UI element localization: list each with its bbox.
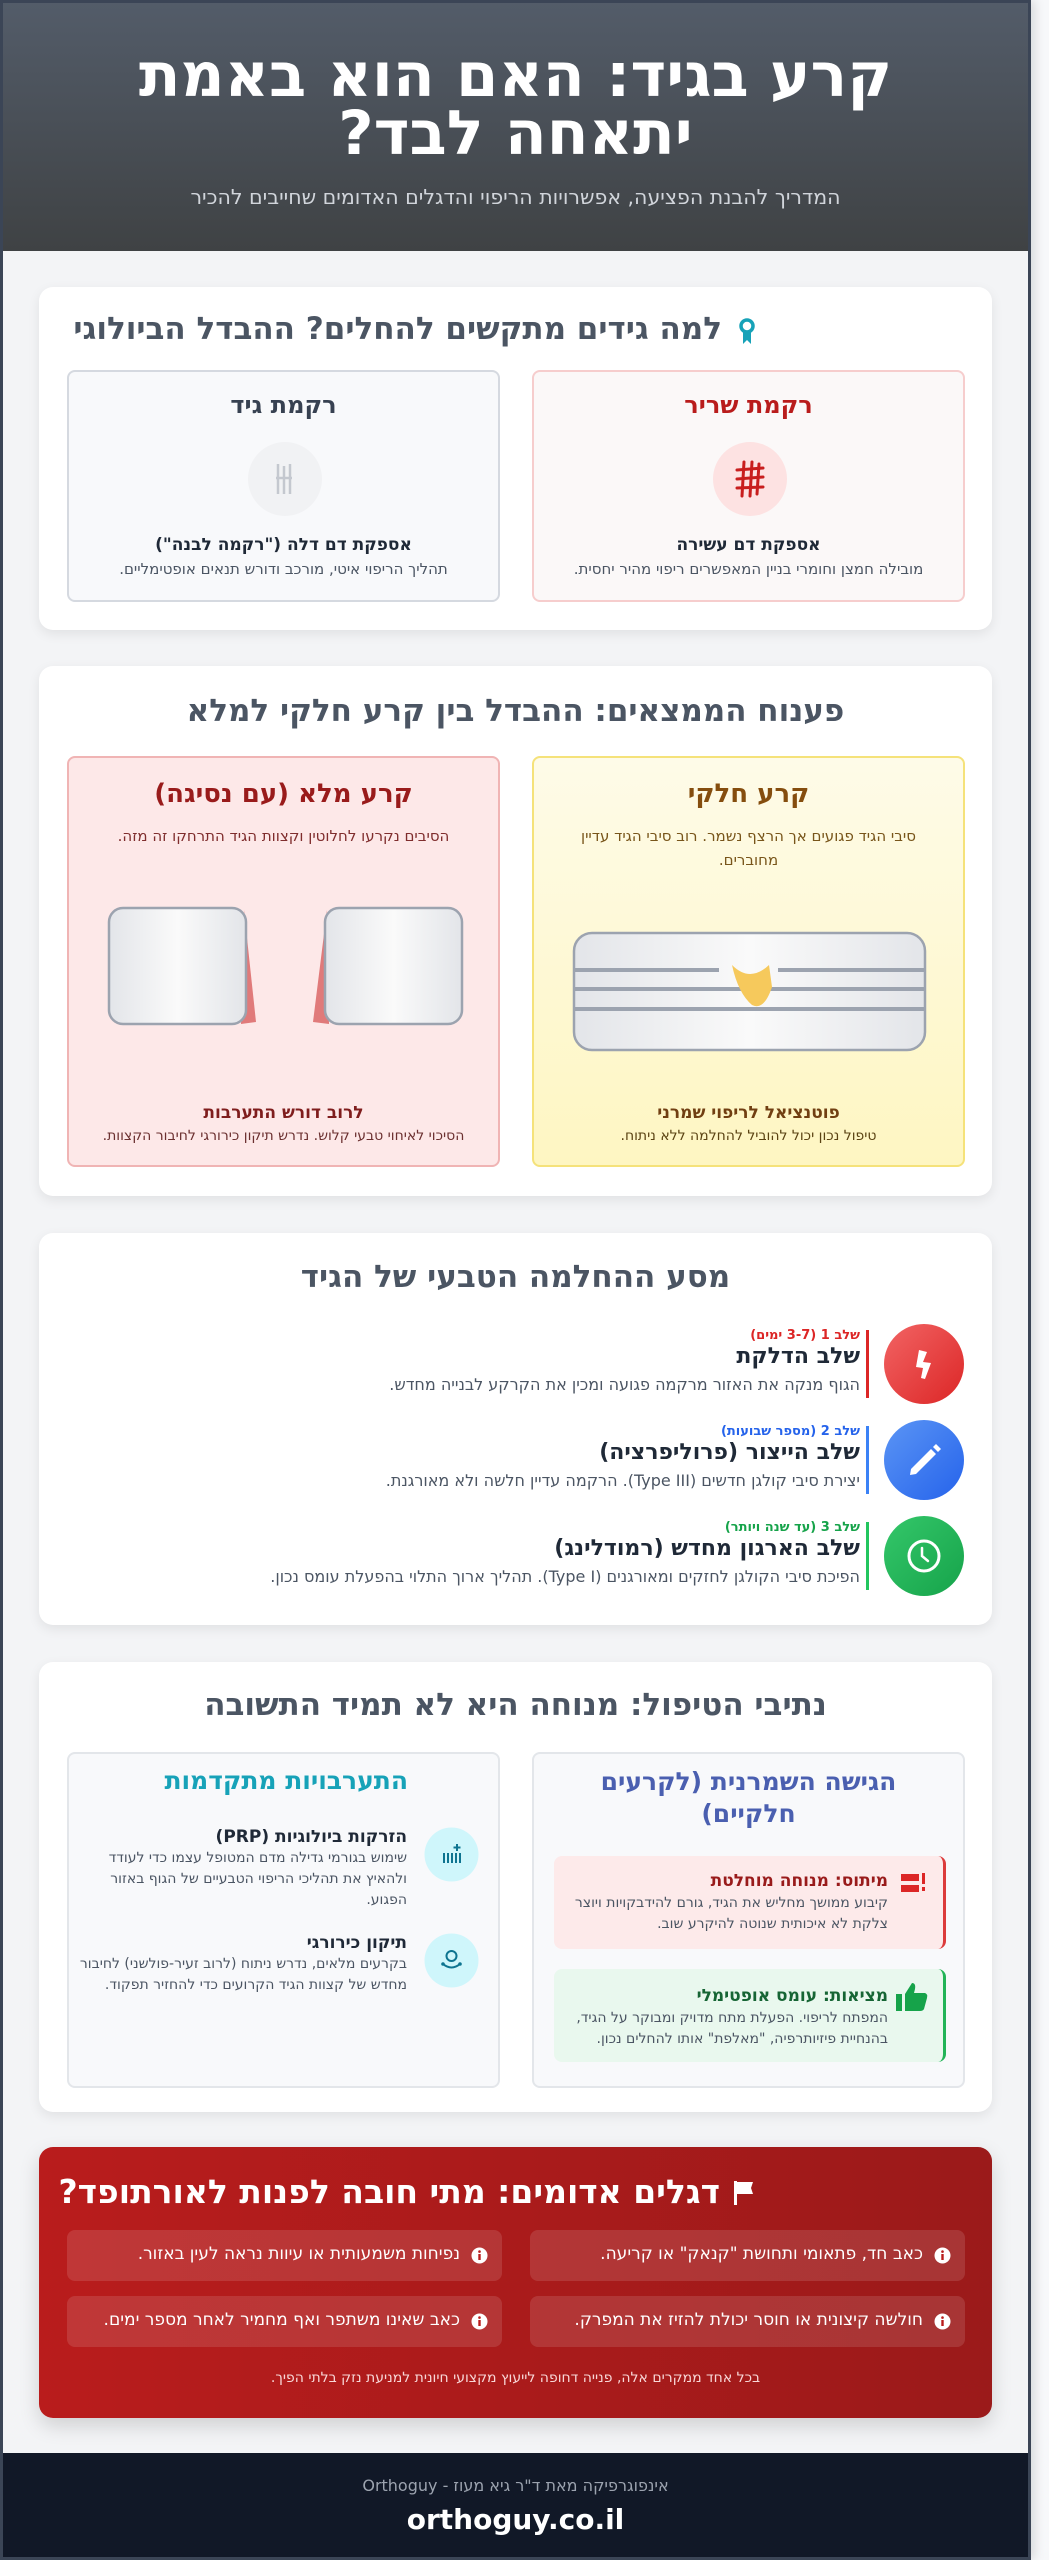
illustration: partially torn tendon (572, 932, 926, 1052)
panel: partial vs full tear (39, 666, 992, 1196)
box: tendon tissue (67, 370, 500, 602)
box: partial tear: סיבי הגיד פגועים אך הרצף נשמר. רוב סיבי הגיד עדיין מחוברים. (581, 827, 916, 869)
box: partial tear: פוטנציאל לריפוי שמרני (657, 1103, 840, 1123)
site url: orthoguy.co.il (407, 2503, 624, 2536)
box: advanced interventions (67, 1752, 500, 2088)
step 3: remodeling (270, 1516, 964, 1596)
step 3: remodeling: שלב הארגון מחדש (רמודלינג) (554, 1536, 860, 1561)
flag item 1 (530, 2230, 965, 2281)
box: full tear: לרוב דורש התערבות (203, 1103, 364, 1123)
step 2: proliferation: שלב הייצור (פרוליפרציה) (599, 1440, 860, 1465)
panel: treatment paths (39, 1662, 992, 2112)
item: surgical repair: בקרעים מלאים, נדרש ניתוח (לרוב זעיר-פולשני) לחיבור מחדש של קצוות הגיד הקרועים כדי להחזיר תפקוד. (80, 1956, 407, 1993)
header (3, 3, 1028, 251)
illustration: retracted tendon ends (108, 906, 464, 1026)
flag item 1: כאב חד, פתאומי ותחושת "קנאק" או קריעה. (600, 2244, 923, 2264)
step 1: inflammation: הגוף מנקה את האזור מרקמה פגועה ומכין את הקרקע לבנייה מחדש. (389, 1375, 860, 1394)
item: PRP injections (109, 1827, 478, 1908)
flag item 3: חולשה קיצונית או חוסר יכולת להזיז את המפרק. (574, 2310, 923, 2330)
icon: tendon fibers (276, 464, 292, 494)
icon: clock (884, 1516, 964, 1596)
flag item 4: כאב שאינו משתפר ואף מחמיר לאחר מספר ימים. (104, 2310, 460, 2330)
item: PRP injections: הזרקות ביולוגיות (PRP) (216, 1827, 407, 1847)
credit: אינפוגרפיקה מאת ד"ר גיא מעוז - Orthoguy (362, 2476, 669, 2495)
box: muscle tissue: אספקת דם עשירה (676, 535, 821, 555)
item: PRP injections: שימוש בגורמי גדילה מדם המטופל עצמו כדי לעודד ולהאיץ את תהליכי הריפוי הטבעיים של הגוף באזור הפגוע. (109, 1850, 407, 1908)
flag item 2: נפיחות משמעותית או עיוות נראה לעין באזור. (138, 2244, 460, 2264)
callout: reality: המפתח לריפוי. הפעלת מתח מדויק ומבוקר על הגיד, בהנחיית פיזיותרפיה, "מאלפת" אותו להחלים נכון. (576, 2010, 888, 2047)
icon: pencil (884, 1420, 964, 1500)
step 3: remodeling: הפיכת סיבי הקולגן לחזקים ומאורגנים (Type I). תהליך ארוך התלוי בהפעלת עומס נכון. (270, 1567, 860, 1586)
note: בכל אחד ממקרים אלה, פנייה דחופה לייעוץ מקצועי חיונית למניעת נזק בלתי הפיך. (271, 2370, 760, 2386)
flag item 3 (530, 2296, 965, 2347)
callout: reality (554, 1969, 946, 2062)
heading: נתיבי הטיפול: מנוחה היא לא תמיד התשובה (204, 1687, 827, 1723)
heading: פענוח הממצאים: ההבדל בין קרע חלקי למלא (187, 693, 844, 729)
title: יתאחה לבד? (338, 98, 693, 169)
title (139, 40, 892, 169)
item: surgical repair: תיקון כירורגי (307, 1933, 407, 1953)
box: muscle tissue: רקמת שריר (684, 391, 813, 419)
icon: surgeon (424, 1934, 478, 1988)
icon: ribbon (739, 318, 755, 344)
step 1: inflammation: שלב 1 (3-7 ימים) (750, 1328, 860, 1343)
box: muscle tissue: מובילה חמצן וחומרי בניין המאפשרים ריפוי מהיר יחסית. (574, 560, 923, 578)
box: tendon tissue: רקמת גיד (230, 391, 337, 419)
flag item 2 (67, 2230, 502, 2281)
flag item 4 (67, 2296, 502, 2347)
callout: myth (554, 1856, 946, 1949)
box: advanced interventions: התערבויות מתקדמות (164, 1766, 408, 1795)
box: partial tear (532, 756, 965, 1167)
box: partial tear: קרע חלקי (688, 779, 809, 809)
box: muscle tissue (532, 370, 965, 602)
step 3: remodeling: שלב 3 (עד שנה ויותר) (725, 1520, 860, 1535)
step 1: inflammation: שלב הדלקת (736, 1344, 860, 1369)
icon: flag (734, 2181, 753, 2205)
box: full tear: הסיבים נקרעו לחלוטין וקצוות הגיד התרחקו זה מזה. (118, 827, 449, 845)
panel: biological difference (39, 287, 992, 630)
step 2: proliferation (386, 1420, 964, 1500)
icon: exclamation (901, 1873, 925, 1892)
step 2: proliferation: שלב 2 (מספר שבועות) (721, 1424, 860, 1439)
callout: myth: קיבוע ממושך מחליש את הגיד, גורם להידבקויות ויוצר צלקת לא איכותית שנוטה להיקרע שוב. (575, 1895, 888, 1932)
callout: reality: מציאות: עומס אופטימלי (697, 1986, 888, 2006)
icon: thumbs up (896, 1983, 928, 2011)
item: surgical repair (80, 1933, 478, 1993)
icon: muscle fibers (713, 442, 787, 516)
box: conservative approach: הגישה השמרנית (לקרעים חלקיים) (601, 1767, 896, 1828)
box: full tear: הסיכוי לאיחוי טבעי קלוש. נדרש תיקון כירורגי לחיבור הקצוות. (103, 1128, 464, 1144)
footer (3, 2453, 1028, 2557)
box: full tear (67, 756, 500, 1167)
heading: מסע ההחלמה הטבעי של הגיד (301, 1259, 730, 1295)
box: tendon tissue: תהליך הריפוי איטי, מורכב ודורש תנאים אופטימליים. (119, 560, 448, 578)
box: full tear: קרע מלא (עם נסיגה) (154, 779, 413, 809)
step 1: inflammation (389, 1324, 964, 1404)
box: tendon tissue: אספקת דם דלה ("רקמה לבנה") (155, 535, 412, 555)
heading: why tendons heal slowly: למה גידים מתקשים להחלים? ההבדל הביולוגי (73, 311, 722, 347)
box: partial tear: טיפול נכון יכול להוביל להחלמה ללא ניתוח. (621, 1128, 876, 1144)
callout: myth: מיתוס: מנוחה מוחלטת (711, 1871, 888, 1891)
subtitle: המדריך להבנת הפציעה, אפשרויות הריפוי והדגלים האדומים שחייבים להכיר (190, 185, 841, 209)
panel: red flags (39, 2147, 992, 2418)
step 2: proliferation: יצירת סיבי קולגן חדשים (Type III). הרקמה עדיין חלשה ולא מאורגנת. (386, 1471, 860, 1490)
box: conservative approach (532, 1752, 965, 2088)
icon: bolt (884, 1324, 964, 1404)
title: קרע בגיד: האם הוא באמת (139, 40, 892, 111)
panel: healing journey (39, 1233, 992, 1625)
heading: red flags: דגלים אדומים: מתי חובה לפנות לאורתופד? (58, 2172, 720, 2211)
icon: syringe (424, 1828, 478, 1882)
